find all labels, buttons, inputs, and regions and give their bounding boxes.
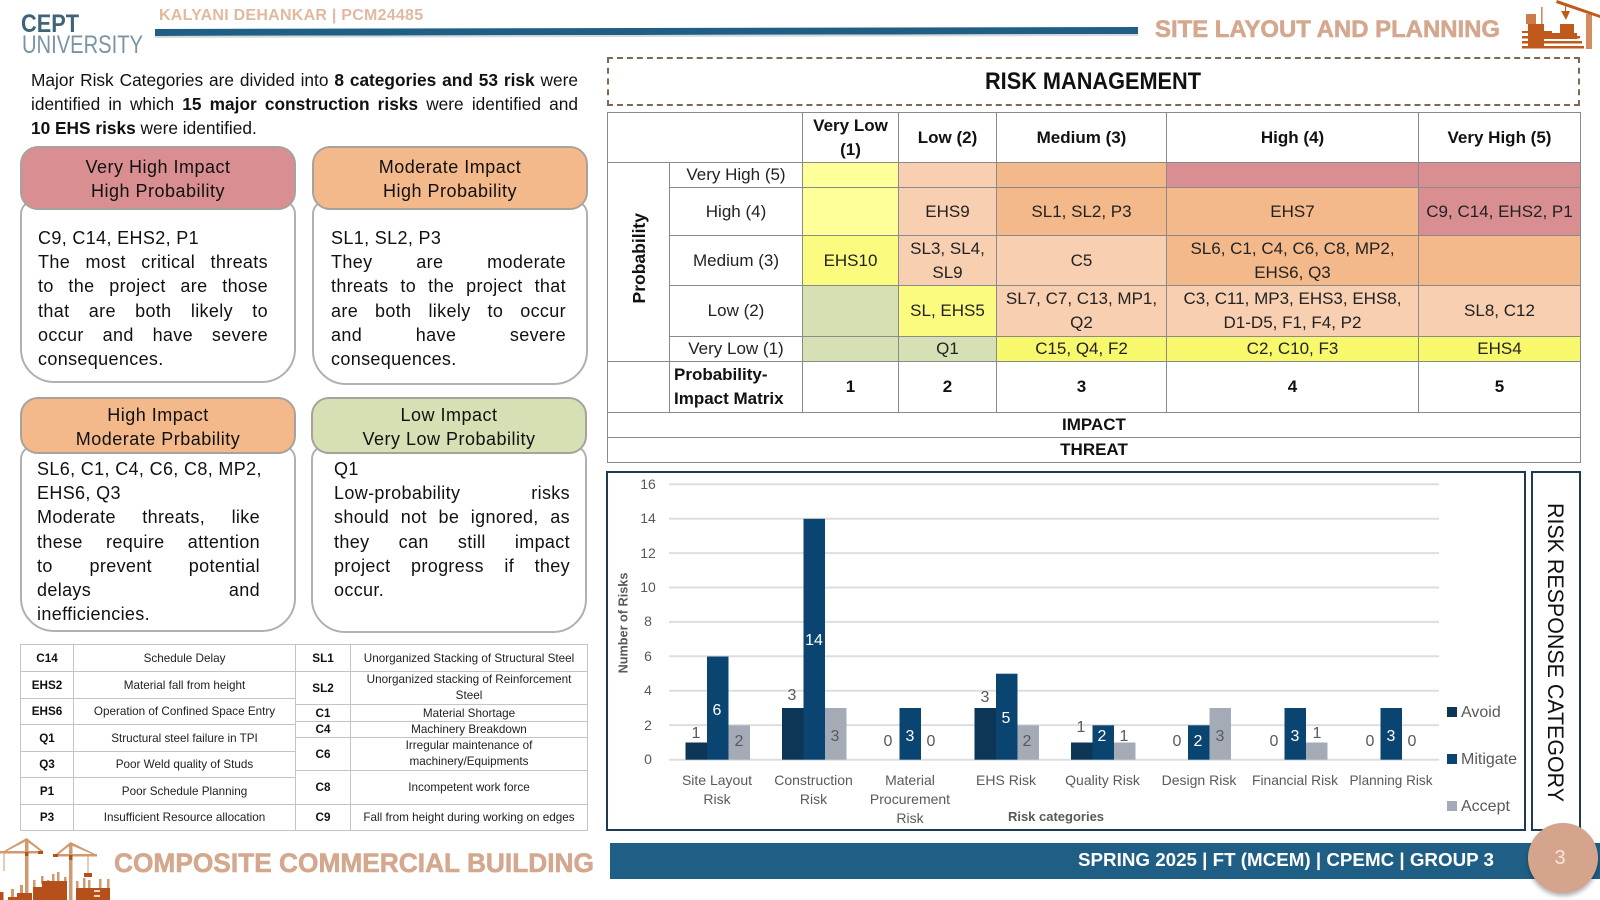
intro paragraph [31,70,578,138]
y axis ticks: 6 [644,648,652,664]
data labels: 1 [1077,719,1086,736]
card body: occur and have severe [38,325,268,345]
row: medium probability: SL9 [932,262,963,282]
impact numbers row: 5 [1495,377,1504,396]
logo: CEPT University: CEPT [21,10,79,38]
row: low probability [708,286,1580,336]
row: high probability: High (4) [706,202,766,220]
y axis ticks: 10 [640,579,656,595]
bars: avoid [686,708,1092,760]
card body: SL1, SL2, P3 [331,228,441,248]
impact numbers row [674,365,1504,408]
header bar [155,27,1138,38]
risk legend table: left: Insufficient Resource allocation [104,811,265,824]
impact scale header: Low (2) [918,128,977,146]
row: medium probability: SL6, C1, C4, C6, C8, MP2, [1190,238,1395,258]
data labels: 3 [831,728,840,745]
y axis ticks: 12 [640,545,656,561]
chart: risk response by category [606,471,1581,831]
card body: Low-probability risks [334,483,570,503]
risk legend table: right: C8 [316,781,330,794]
risk legend table: left: C14 [36,652,58,664]
card body: and have severe [331,325,566,345]
row: medium probability: EHS6, Q3 [1254,262,1331,282]
y axis title: Number of Risks [616,573,630,673]
row: low probability: SL8, C12 [1464,301,1535,320]
risk legend table: right: C1 [316,706,330,720]
risk legend table: right: C4 [316,723,330,736]
data labels: 0 [884,733,893,750]
row: high probability: EHS7 [1270,202,1315,220]
intro paragraph: Major Risk Categories are divided into 8 categories and 53 risk were [31,70,578,90]
card body: to the project are those [38,276,268,296]
impact numbers row: Probability- [674,365,768,384]
row: high probability: EHS9 [925,202,970,220]
card heading [20,146,296,210]
card body: SL6, C1, C4, C6, C8, MP2, [37,459,262,479]
card body: EHS6, Q3 [37,483,121,503]
category labels: Risk [703,791,732,807]
impact numbers row: Impact Matrix [674,389,784,408]
impact scale header: High (4) [1261,128,1324,146]
risk legend table: left: Q3 [39,758,55,771]
card heading: Moderate Impact [379,157,521,177]
card body: The most critical threats [38,252,268,272]
card body: to prevent potential [37,556,260,576]
card body: Q1 [334,459,359,479]
data labels: 3 [1291,728,1300,745]
risk legend table: left: Schedule Delay [144,652,225,664]
card body: are both likely to occur [331,301,566,321]
risk legend table: right: SL1 [312,652,334,664]
row: low probability: SL7, C7, C13, MP1, [1006,289,1157,308]
row: low probability: Q2 [1070,313,1093,332]
card heading: High Impact [107,405,209,425]
x axis title: Risk categories [1008,809,1104,824]
risk legend table: left: Poor Weld quality of Studs [116,758,253,771]
intro paragraph: identified in which 15 major construction risks were identified and [31,94,578,114]
data labels: 6 [713,702,722,719]
card: moderate impact [312,146,588,385]
risk legend table: left: P3 [40,811,54,824]
risk legend table: right: C9 [316,811,330,824]
data labels: 1 [1313,725,1322,742]
card body: inefficiencies. [37,604,150,624]
data labels: 14 [805,632,823,649]
row: very low probability: EHS4 [1477,339,1522,358]
category labels: Quality Risk [1065,772,1141,788]
intro paragraph: 10 EHS risks were identified. [31,118,257,138]
impact numbers row: 4 [1288,377,1297,396]
card heading [312,146,588,210]
side label: risk response category: RISK RESPONSE CATEGORY [1543,503,1568,802]
impact scale header: Probability [628,213,648,304]
category labels: Material [885,772,935,788]
data labels: 2 [1194,733,1203,750]
card body: they can still impact [334,532,570,552]
y axis ticks: 8 [644,613,652,629]
card: low impact [311,397,587,633]
row: high probability [706,188,1580,235]
card body: Moderate threats, like [37,507,260,527]
row: medium probability: EHS10 [824,250,877,270]
data labels: 2 [1023,733,1032,750]
impact scale header: Very Low [813,116,888,134]
impact scale header: Medium (3) [1037,128,1126,146]
category labels: Risk [896,810,925,826]
data labels: 5 [1002,710,1011,727]
category labels: Construction [774,772,853,788]
category labels: Design Risk [1162,772,1237,788]
page number badge: 3 [1554,847,1566,869]
card body: project progress if they [334,556,570,576]
author name: KALYANI DEHANKAR | PCM24485 [159,7,423,24]
risk legend table: right: Steel [456,689,482,702]
risk legend table: right: Material Shortage [423,706,515,720]
row: low probability: SL, EHS5 [910,301,985,320]
card heading: Moderate Prbability [76,429,240,449]
project title: COMPOSITE COMMERCIAL BUILDING [114,848,594,878]
data labels: 3 [788,687,797,704]
card heading: Very Low Probability [362,429,536,449]
probability-impact matrix [607,112,1581,463]
legend: Avoid [1461,704,1501,721]
risk legend table: right: Fall from height during working on edges [363,811,575,824]
data labels: 3 [981,689,990,706]
icon: cranes and skyline [0,838,110,900]
category labels: Site Layout [682,772,752,788]
y axis ticks: 2 [644,717,652,733]
card: very high impact [20,146,296,383]
row: low probability: C3, C11, MP3, EHS3, EHS8, [1184,289,1401,308]
data labels: 1 [1120,728,1129,745]
row: low probability: D1-D5, F1, F4, P2 [1224,313,1361,332]
category labels: Planning Risk [1350,772,1433,788]
footer band [610,843,1600,879]
data labels: 1 [692,725,701,742]
row: high probability: SL1, SL2, P3 [1031,202,1132,220]
row: very high probability [628,163,1580,304]
risk legend table: right [296,644,588,831]
impact numbers row: 3 [1077,377,1086,396]
heading: risk management [607,57,1580,106]
data labels: 0 [1173,733,1182,750]
y axis ticks: 4 [644,682,652,698]
impact numbers row: 1 [846,377,855,396]
risk legend table: left: EHS2 [32,678,62,692]
category labels: Risk [800,791,828,807]
threat label: THREAT [1060,440,1128,459]
impact scale header [628,116,1580,459]
row: very low probability: Very Low (1) [688,339,784,358]
risk legend table: right: Machinery Breakdown [411,723,527,736]
risk legend table: right: Incompetent work force [408,781,530,794]
y axis ticks: 14 [640,510,656,526]
data labels: 2 [1098,728,1107,745]
risk legend table: left: Structural steel failure in TPI [111,732,258,744]
card heading [311,397,587,454]
row: very low probability [688,337,1580,361]
risk legend table: left: Q1 [39,732,55,744]
impact scale header: Very High (5) [1448,128,1551,146]
page number badge [1528,823,1598,893]
category labels [682,772,1433,826]
legend: Accept [1461,798,1510,815]
row: medium probability: Medium (3) [693,250,779,270]
risk legend table: left [20,644,295,831]
impact numbers row: 2 [943,377,952,396]
risk legend table: right: machinery/Equipments [410,755,528,768]
bars: accept [728,708,1328,760]
card body: these require attention [37,532,260,552]
row: very low probability: Q1 [936,339,959,358]
row: very high probability: Very High (5) [686,165,786,184]
card heading: High Probability [383,181,517,201]
category labels: Financial Risk [1252,772,1339,788]
category labels: Procurement [870,791,950,807]
data labels: 2 [735,733,744,750]
y axis ticks: 0 [644,751,652,767]
card body: consequences. [331,349,457,369]
row: very low probability: C2, C10, F3 [1247,339,1338,358]
card heading: Low Impact [400,405,498,425]
icon: building under construction with crane [1522,0,1600,49]
data labels: 0 [1366,733,1375,750]
card body [311,445,587,633]
data labels: 0 [1270,733,1279,750]
card body: should not be ignored, as [334,507,570,527]
risk legend table: left: P1 [40,784,54,798]
data labels: 0 [927,733,936,750]
y axis ticks [640,476,656,767]
row: medium probability [693,236,1580,285]
card body [312,200,588,385]
risk legend table: right: SL2 [312,682,334,694]
risk legend table: left: EHS6 [32,705,62,718]
card heading [20,397,296,454]
data labels: 3 [906,728,915,745]
data labels: 3 [1387,728,1396,745]
card body: occur. [334,580,384,600]
data labels [692,632,1417,750]
data labels: 0 [1408,733,1417,750]
legend [1447,704,1517,815]
impact label: IMPACT [1062,415,1126,434]
legend: Mitigate [1461,751,1517,768]
row: very low probability: C15, Q4, F2 [1035,339,1128,358]
card body [20,200,296,383]
card body: threats to the project that [331,276,566,296]
card body: They are moderate [331,252,566,272]
bars: mitigate [707,519,1402,760]
risk legend table: left: Operation of Confined Space Entry [94,705,275,718]
section title: SITE LAYOUT AND PLANNING [1155,16,1500,43]
footer text: SPRING 2025 | FT (MCEM) | CPEMC | GROUP 3 [1078,850,1494,870]
risk legend table: left: Poor Schedule Planning [122,784,247,798]
risk legend table: right: Irregular maintenance of [406,739,532,752]
heading: risk management: RISK MANAGEMENT [985,68,1201,95]
logo: CEPT University [21,10,143,58]
row: medium probability: SL3, SL4, [910,238,985,258]
category labels: EHS Risk [976,772,1037,788]
card heading: Very High Impact [85,157,231,177]
card heading: High Probability [91,181,225,201]
risk legend table: right: Unorganized stacking of Reinforcement [367,673,571,686]
y axis ticks: 16 [640,476,656,492]
risk legend table: right: C6 [316,748,330,760]
row: high probability: C9, C14, EHS2, P1 [1426,202,1573,220]
risk legend table: left: Material fall from height [124,678,245,692]
row: medium probability: C5 [1071,250,1092,270]
card: high impact [20,397,296,632]
card body [20,445,296,632]
card body: that are both likely to [38,301,268,321]
data labels: 3 [1216,728,1225,745]
row: low probability: Low (2) [708,301,764,320]
card body: C9, C14, EHS2, P1 [38,228,199,248]
card body: consequences. [38,349,164,369]
card body: delays and [37,580,260,600]
impact scale header: (1) [840,140,861,158]
risk legend table: right: Unorganized Stacking of Structural Steel [364,652,574,664]
